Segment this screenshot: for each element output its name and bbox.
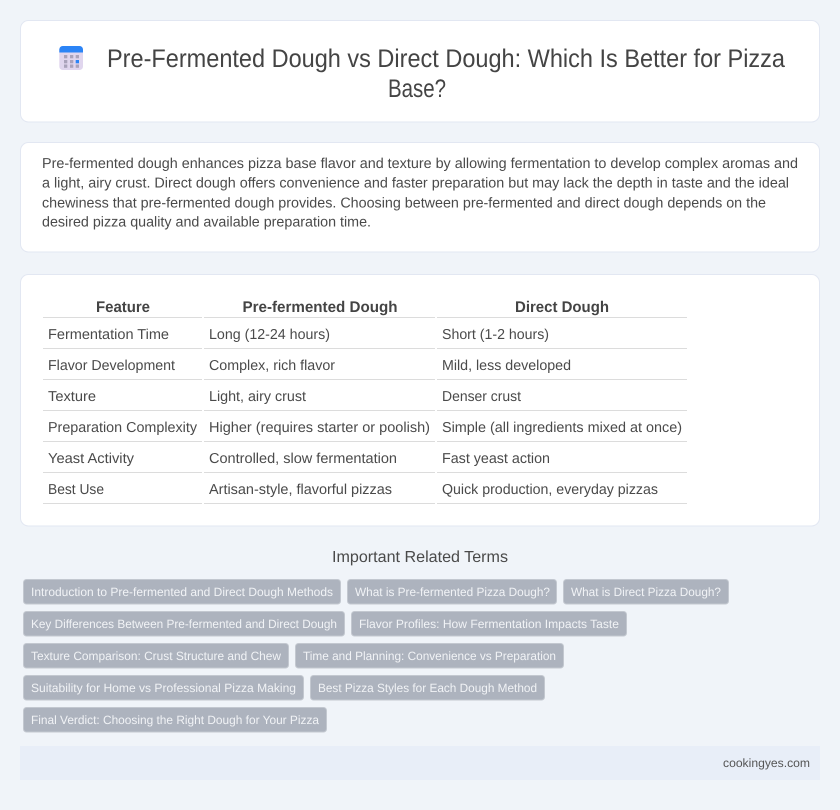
table header: Pre-fermented Dough <box>242 299 398 316</box>
row: fermentation time <box>48 327 549 343</box>
row: texture: Light, airy crust <box>209 389 306 405</box>
row: yeast activity: Controlled, slow fermentation <box>209 451 397 467</box>
tag <box>24 676 304 700</box>
row: best use <box>48 482 658 498</box>
tag: Texture Comparison: Crust Structure and Chew <box>31 649 281 663</box>
row: yeast activity <box>48 451 550 467</box>
summary text: Pre-fermented dough enhances pizza base flavor and texture by allowing fermentation to develop complex aromas and <box>42 156 798 172</box>
row: fermentation time: Long (12-24 hours) <box>209 327 330 343</box>
tag <box>24 644 288 668</box>
row: preparation complexity <box>48 420 682 436</box>
tag: Final Verdict: Choosing the Right Dough for Your Pizza <box>31 713 319 727</box>
panel: summary <box>20 142 820 252</box>
row: flavor development: Complex, rich flavor <box>209 358 335 374</box>
tag <box>348 580 556 604</box>
title: Pre-Fermented Dough vs Direct Dough: Which Is Better for Pizza <box>107 45 786 73</box>
row: texture: Denser crust <box>442 389 521 405</box>
row: best use: Best Use <box>48 482 104 498</box>
icon: calendar <box>59 46 83 70</box>
row: preparation complexity: Simple (all ingredients mixed at once) <box>442 420 682 436</box>
row: yeast activity: Fast yeast action <box>442 451 550 467</box>
tag: What is Direct Pizza Dough? <box>571 585 721 599</box>
row: preparation complexity: Preparation Complexity <box>48 420 198 436</box>
tag <box>296 644 564 668</box>
row: flavor development: Flavor Development <box>48 358 175 374</box>
row: best use: Quick production, everyday pizzas <box>442 482 658 498</box>
tag: Suitability for Home vs Professional Pizza Making <box>31 681 296 695</box>
panel: header <box>20 20 820 122</box>
row: preparation complexity: Higher (requires starter or poolish) <box>209 420 430 436</box>
table header: Direct Dough <box>515 299 609 316</box>
heading: important related terms: Important Related Terms <box>332 549 508 566</box>
summary text: chewiness that pre-fermented dough provides. Choosing between pre-fermented and direct dough depends on the <box>42 196 766 212</box>
tag <box>24 580 340 604</box>
table header: Feature <box>96 299 150 316</box>
tag <box>352 612 626 636</box>
row: flavor development <box>48 358 571 374</box>
row: fermentation time: Short (1-2 hours) <box>442 327 549 343</box>
row: flavor development: Mild, less developed <box>442 358 571 374</box>
row: texture <box>48 389 521 405</box>
tag: Best Pizza Styles for Each Dough Method <box>318 681 537 695</box>
tag <box>24 708 326 732</box>
tag <box>310 676 544 700</box>
row: best use: Artisan-style, flavorful pizzas <box>209 482 392 498</box>
tag: Flavor Profiles: How Fermentation Impacts Taste <box>359 617 619 631</box>
footer <box>20 746 820 780</box>
summary text: desired pizza quality and available preparation time. <box>42 214 371 230</box>
row: fermentation time: Fermentation Time <box>48 327 169 343</box>
summary text: a light, airy crust. Direct dough offers convenience and faster preparation but may lack the depth in taste and the ideal <box>42 176 789 192</box>
row: yeast activity: Yeast Activity <box>48 451 135 467</box>
tag <box>564 580 728 604</box>
title: Base? <box>388 75 446 103</box>
tag: Introduction to Pre-fermented and Direct Dough Methods <box>31 585 333 599</box>
table header <box>96 299 609 316</box>
tag: Key Differences Between Pre-fermented and Direct Dough <box>31 617 337 631</box>
tag <box>24 612 344 636</box>
row: texture: Texture <box>48 389 96 405</box>
panel: comparison table <box>20 274 820 526</box>
footer: cookingyes.com <box>723 756 810 770</box>
tag: Time and Planning: Convenience vs Preparation <box>303 649 556 663</box>
related terms tags <box>24 580 728 732</box>
tag: What is Pre-fermented Pizza Dough? <box>355 585 550 599</box>
